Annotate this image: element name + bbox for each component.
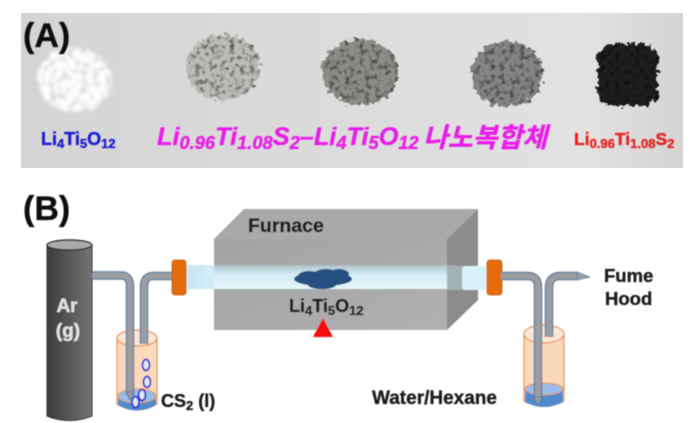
label: Li0.96Ti1.08S2: Ti	[615, 129, 630, 149]
sample label: 4	[305, 303, 313, 318]
photo background	[21, 13, 683, 168]
tube cap: left	[172, 260, 186, 295]
label: composite name: 4	[335, 132, 346, 153]
label: composite name: 12	[398, 132, 419, 153]
argon cylinder: (g)	[56, 321, 80, 342]
sample label: 12	[349, 303, 364, 318]
label: CS2 (l): CS	[161, 391, 186, 411]
powder pile: white Li4Ti5O12	[38, 48, 112, 112]
label: composite name: O	[379, 123, 399, 151]
label: Water/Hexane: Water/Hexane	[372, 388, 497, 409]
label: Fume Hood: Hood	[605, 288, 652, 309]
label: composite name: 5	[369, 132, 380, 153]
argon cylinder	[47, 240, 92, 420]
label: composite name: –Li	[300, 123, 337, 151]
right trap vial	[524, 325, 564, 407]
label: Li0.96Ti1.08S2: 1.08	[630, 136, 655, 151]
label: Li4Ti5O12: O	[87, 129, 101, 149]
sample label: 5	[328, 303, 335, 318]
sample label: Li	[289, 296, 305, 316]
label: Li0.96Ti1.08S2: 2	[667, 136, 674, 151]
heading: (A): (A)	[23, 17, 70, 55]
label: Fume Hood	[604, 265, 653, 309]
panel A: powder photograph	[21, 13, 683, 168]
heating marker: red triangle	[313, 318, 333, 337]
sample: Li4Ti5O12 powder	[294, 269, 352, 289]
left gas pipes	[92, 276, 172, 400]
label: Li4Ti5O12: 4	[57, 136, 65, 151]
powder pile: dark gray composite	[471, 41, 543, 107]
left bubbler vial	[117, 330, 157, 410]
sample label: Ti	[312, 296, 328, 316]
label: composite name: Ti	[215, 123, 238, 151]
label: Li4Ti5O12: Li	[41, 129, 57, 149]
furnace label: Furnace	[248, 215, 324, 237]
label: Li0.96Ti1.08S2: Li	[574, 129, 590, 149]
label: Li4Ti5O12: 12	[101, 136, 116, 151]
panel B: synthesis apparatus	[23, 190, 653, 420]
label: Li0.96Ti1.08S2: S	[655, 129, 667, 149]
heading: (B): (B)	[23, 190, 70, 228]
bubbles	[132, 360, 150, 408]
label: Korean nanocomposite: 나노복합체	[423, 123, 551, 153]
quartz tube	[187, 265, 487, 290]
powder pile: medium gray composite	[322, 39, 398, 105]
label: Li0.96Ti1.08S2: 0.96	[590, 136, 615, 151]
right exhaust pipes	[501, 272, 590, 405]
furnace	[214, 209, 478, 330]
label: CS2 (l): 2	[186, 398, 193, 413]
label: composite name: 2	[289, 132, 300, 153]
cylinder label: Ar	[56, 296, 78, 317]
label: Li4Ti5O12: Ti	[64, 129, 80, 149]
label: composite name: Ti	[346, 123, 369, 151]
label: composite name: 0.96	[179, 132, 216, 153]
label: Fume Hood: Fume	[604, 265, 653, 286]
label: composite name: Li	[157, 123, 179, 151]
sample label: O	[335, 296, 349, 316]
label: composite name: 1.08	[237, 132, 274, 153]
powder pile: black Li0.96Ti1.08S2	[598, 44, 658, 106]
powder pile: light gray composite	[186, 34, 260, 100]
tube cap: right	[487, 260, 502, 295]
label: Li4Ti5O12: 5	[80, 136, 87, 151]
label: CS2 (l): (l)	[193, 391, 215, 411]
label: composite name: S	[273, 123, 290, 151]
